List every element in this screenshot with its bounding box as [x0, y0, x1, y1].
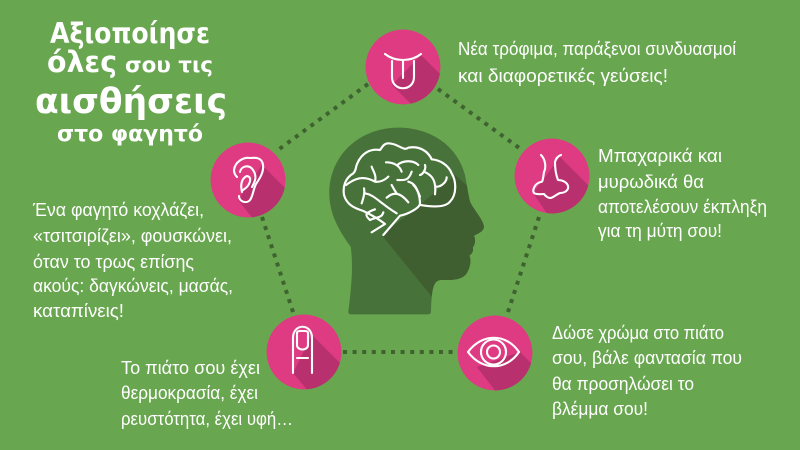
text: sight: σου, βάλε φαντασία που: [552, 347, 742, 368]
head silhouette with brain: [329, 128, 493, 314]
text: touch: θερμοκρασία, έχει: [121, 382, 258, 403]
text: hearing: ακούς: δαγκώνεις, μασάς,: [33, 275, 233, 296]
text: sight: [552, 322, 742, 419]
text: taste: Νέα τρόφιμα, παράξενοι συνδυασμοί: [458, 38, 736, 59]
icon: nose: [514, 138, 590, 214]
text: smell: μυρωδικά θα: [598, 171, 704, 192]
title: στο φαγητό: [57, 122, 203, 147]
title: σου τις: [125, 53, 213, 77]
text: touch: ρευστότητα, έχει υφή…: [121, 408, 293, 429]
text: touch: Το πιάτο σου έχει: [121, 357, 260, 378]
text: smell: για τη μύτη σου!: [598, 220, 722, 241]
text: hearing: όταν το τρως επίσης: [33, 251, 194, 272]
text: sight: Δώσε χρώμα στο πιάτο: [552, 322, 724, 343]
text: hearing: «τσιτσιρίζει», φουσκώνει,: [33, 225, 232, 246]
title: Αξιοποίησε: [50, 17, 210, 50]
icon: ear: [210, 142, 286, 218]
icon: brain: [344, 143, 455, 235]
text: smell: [598, 145, 767, 241]
text: hearing: Ένα φαγητό κοχλάζει,: [32, 199, 204, 220]
title: αισθήσεις: [35, 82, 227, 122]
icon: tongue: [366, 30, 440, 104]
title: όλες: [47, 45, 117, 79]
text: touch: [121, 357, 293, 429]
icon: finger: [266, 314, 342, 390]
text: sight: θα προσηλώσει το: [552, 373, 694, 394]
text: taste: [458, 38, 736, 86]
text: smell: αποτελέσουν έκπληξη: [598, 196, 767, 217]
text: sight: βλέμμα σου!: [552, 398, 648, 419]
text: hearing: καταπίνεις!: [33, 300, 124, 321]
text: hearing: [32, 199, 233, 321]
text: taste: και διαφορετικές γεύσεις!: [458, 65, 668, 86]
title: [35, 17, 227, 147]
text: smell: Μπαχαρικά και: [598, 145, 722, 166]
icon: eye: [458, 316, 532, 390]
